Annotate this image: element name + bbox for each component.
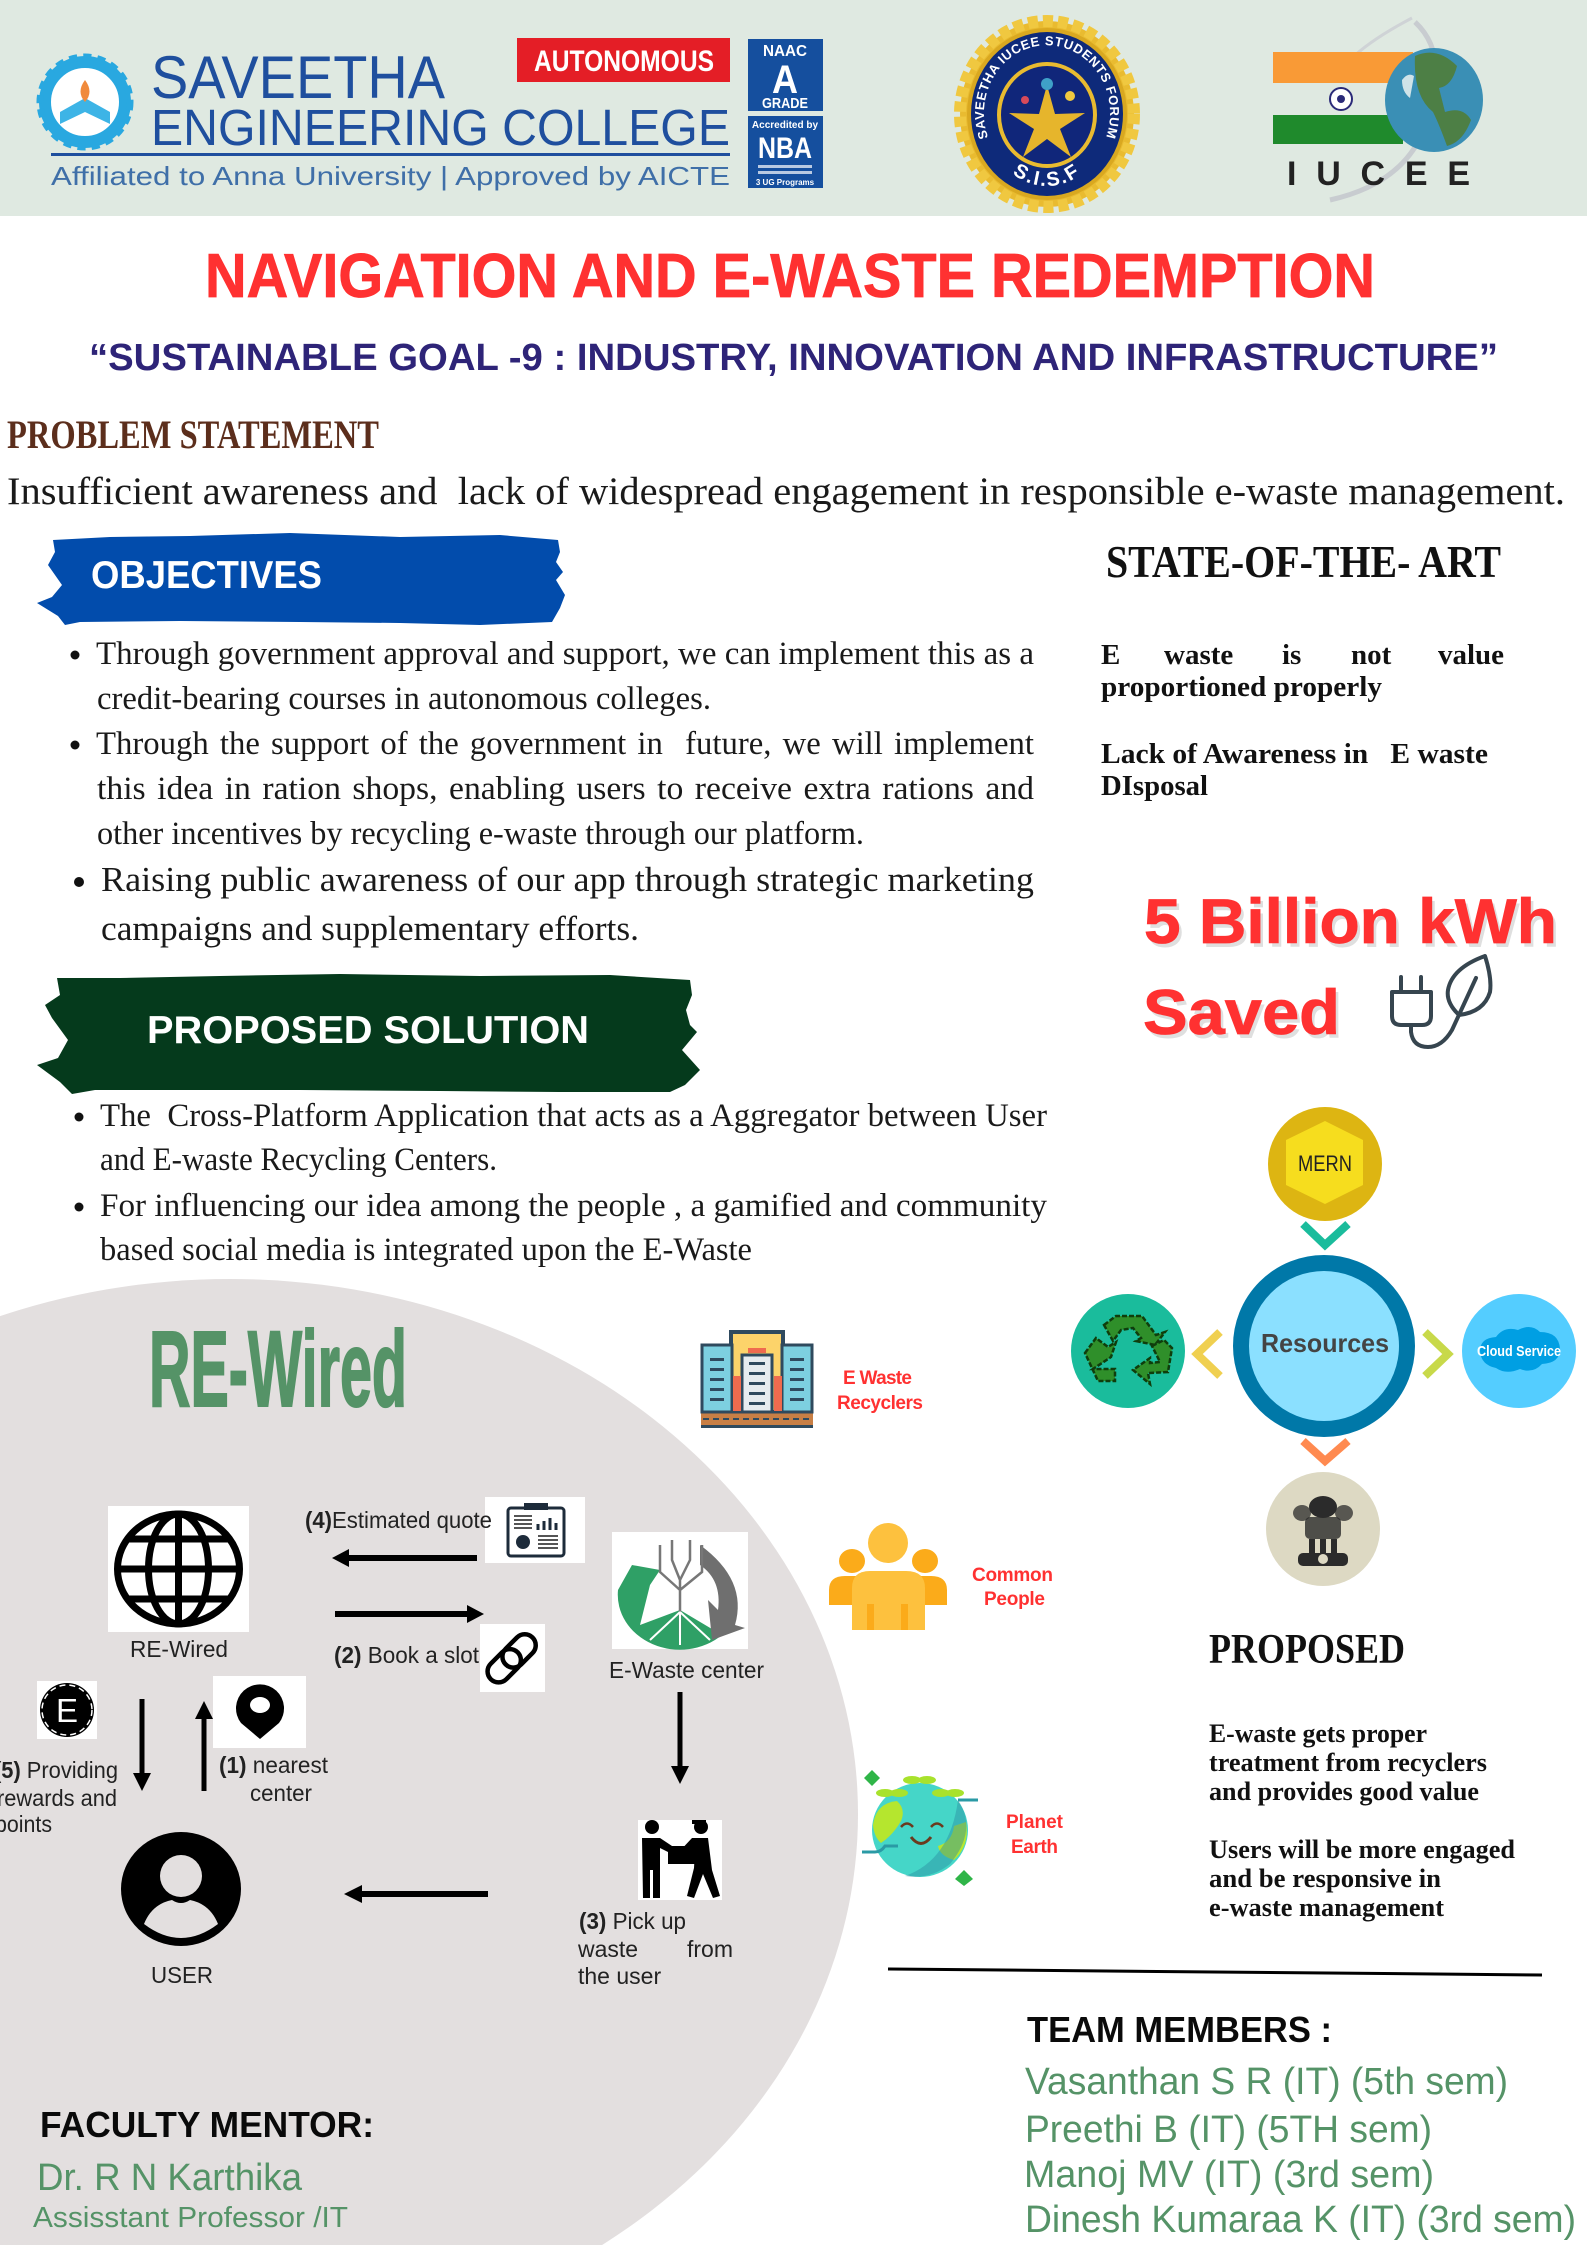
bullets: objectives: campaigns and supplementary efforts. (101, 909, 639, 948)
icon: SISF badge: SAVEETHA IUCEE STUDENTS FORUM (974, 36, 1119, 139)
callout: 5 billion kWh saved: Saved (1146, 982, 1343, 1052)
college rule line (51, 153, 730, 156)
callout: 5 billion kWh saved: 5 Billion kWh (1144, 887, 1557, 957)
text: state of the art: Lack of Awareness in E waste (1101, 738, 1488, 770)
icon: people group (829, 1523, 947, 1630)
college name (151, 44, 730, 156)
bullets: objectives: this idea in ration shops, enabling users to receive extra rations and (97, 771, 1035, 807)
panel: header band (0, 0, 1587, 216)
callout: 5 billion kWh saved (1143, 887, 1560, 1052)
icon: location pin (213, 1676, 306, 1748)
text: proposed benefits: Users will be more engaged (1209, 1835, 1516, 1864)
arrow: center to pickup (671, 1692, 689, 1784)
text: proposed benefits: and be responsive in (1209, 1864, 1442, 1893)
bullets: objectives: credit-bearing courses in autonomous colleges. (97, 681, 711, 717)
label: step 3: waste (577, 1936, 638, 1962)
badge: NBA: Accredited by (752, 120, 819, 131)
panel: proposed solution heading (37, 974, 700, 1094)
icon: reward coin (37, 1681, 97, 1739)
text: team member names: Preethi B (IT) (5TH sem) (1025, 2109, 1432, 2151)
icon: quote clipboard (485, 1497, 585, 1563)
icon: globe (108, 1506, 249, 1632)
callout: 5 billion kWh saved: Saved (1143, 978, 1340, 1048)
bullets: objectives: other incentives by recycling e-waste through our platform. (97, 816, 864, 852)
text: state of the art: DIsposal (1101, 770, 1208, 802)
icon: IUCEE flag and globe (1273, 18, 1483, 200)
stakeholder: planet earth (862, 1770, 1064, 1886)
text: state of the art: waste (1164, 639, 1233, 671)
badge: NAAC A grade: GRADE (762, 95, 808, 112)
heading: state of the art: STATE-OF-THE- ART (1106, 536, 1501, 587)
label: step 4: (4)Estimated quote (305, 1507, 492, 1533)
label: step 3: (3) Pick up (579, 1908, 686, 1934)
bullets: objectives: Through the support of the government in future, we will implement (96, 726, 1034, 762)
heading: faculty mentor: FACULTY MENTOR: (40, 2104, 374, 2145)
affiliation line: Affiliated to Anna University | Approved by AICTE (51, 161, 730, 191)
icon: pickup handover (638, 1820, 722, 1900)
node: MERN: MERN (1298, 1151, 1352, 1176)
icon: recycler buildings (701, 1332, 813, 1428)
badge: autonomous: AUTONOMOUS (534, 45, 714, 78)
badge: NBA: NBA (758, 132, 812, 165)
label: step 1 (219, 1752, 329, 1806)
label: user: USER (151, 1962, 213, 1988)
diagram: resources hub (1071, 1107, 1576, 1586)
arrow: lime chevron (1425, 1332, 1448, 1376)
brush stroke: proposed solution (37, 974, 700, 1094)
IUCEE wordmark: IUCEE (1287, 155, 1470, 193)
icon: e-waste center tree (612, 1532, 748, 1650)
badge: NAAC A grade: A (772, 58, 798, 102)
arrow: quote to RE-Wired (332, 1549, 477, 1567)
arrow: RE-Wired to booking (335, 1605, 484, 1623)
node: resources (1241, 1263, 1407, 1429)
arrow: yellow chevron (1197, 1332, 1220, 1376)
icon: SISF badge (954, 15, 1140, 213)
title: NAVIGATION AND E-WASTE REDEMPTION (205, 242, 1375, 311)
label: step 2: (2) Book a slot (334, 1642, 480, 1668)
text: team member names: Vasanthan S R (IT) (5th sem) (1025, 2061, 1508, 2103)
node: cloud service: Cloud Service (1477, 1343, 1561, 1360)
node: government emblem (1266, 1472, 1380, 1586)
node: recycled circuit (1071, 1294, 1185, 1408)
bullets: proposed solution: For influencing our idea among the people , a gamified and community (100, 1188, 1047, 1224)
icon: reward coin: E (56, 1692, 78, 1729)
arrow: orange chevron (1303, 1441, 1348, 1461)
icon: plug and leaf (1392, 956, 1490, 1047)
label: e waste recyclers: Recyclers (837, 1393, 923, 1414)
college name: SAVEETHA (151, 44, 445, 111)
label: e-waste center: E-Waste center (609, 1657, 764, 1683)
arrow: RE-Wired to user (133, 1699, 151, 1791)
label: planet earth: Planet (1006, 1812, 1064, 1833)
badge: NBA: 3 UG Programs (756, 178, 815, 187)
label: e waste recyclers: E Waste (843, 1368, 912, 1389)
text: state of the art: E (1101, 639, 1120, 671)
text: state of the art: proportioned properly (1101, 671, 1382, 703)
bullets: proposed solution: The Cross-Platform Application that acts as a Aggregator between User (100, 1098, 1047, 1134)
icon: smiling earth (862, 1770, 978, 1886)
label: step 1: (1) nearest (219, 1752, 329, 1778)
text: problem statement: Insufficient awareness and lack of widespread engagement in responsible e-waste management. (7, 470, 1565, 513)
panel: objectives heading (37, 533, 565, 625)
bullets: objectives (70, 636, 1035, 948)
label: step 1: center (250, 1780, 312, 1806)
label: step 3: the user (578, 1963, 661, 1989)
text: state of the art: is (1282, 639, 1301, 671)
text: proposed benefits (1209, 1719, 1516, 1922)
label: step 5 (0, 1757, 118, 1837)
label: common people (972, 1565, 1053, 1610)
subtitle: sustainable goal: “SUSTAINABLE GOAL -9 : INDUSTRY, INNOVATION AND INFRASTRUCTURE” (89, 337, 1498, 379)
label: common people: Common (972, 1565, 1053, 1586)
label: RE-Wired: RE-Wired (130, 1636, 228, 1662)
stakeholder: e waste recyclers (701, 1332, 923, 1428)
text: proposed benefits: treatment from recyclers (1209, 1748, 1487, 1777)
bullets: objectives: Through government approval and support, we can implement this as a (96, 636, 1034, 672)
icon: user (121, 1832, 241, 1946)
heading: RE-Wired: RE-Wired (149, 1308, 407, 1429)
bullets: proposed solution: and E-waste Recycling Centers. (100, 1142, 497, 1178)
arrow: user to RE-Wired (195, 1701, 213, 1791)
node: MERN (1268, 1107, 1382, 1221)
text: team member names: Dinesh Kumaraa K (IT) (3rd sem) (1025, 2199, 1576, 2241)
panel: proposed solution heading: PROPOSED SOLUTION (147, 1009, 589, 1052)
icon: college gear emblem (40, 57, 130, 147)
node: resources: Resources (1261, 1328, 1389, 1358)
label: step 3: from (687, 1936, 733, 1962)
badge: NAAC A grade (748, 39, 823, 112)
badge: NBA (748, 116, 823, 188)
arrow: pickup to user (344, 1885, 488, 1903)
badge: NAAC A grade: NAAC (763, 43, 807, 60)
label: step 5: rewards and (0, 1785, 117, 1811)
text: state of the art: value (1438, 639, 1504, 671)
text: state of the art (1101, 639, 1504, 802)
text: proposed benefits: e-waste management (1209, 1893, 1444, 1922)
panel: objectives heading: OBJECTIVES (91, 554, 322, 597)
arrow: teal chevron (1303, 1224, 1348, 1245)
text: mentor role: Assisstant Professor /IT (33, 2202, 348, 2234)
bullets: objectives: Raising public awareness of our app through strategic marketing (101, 860, 1034, 899)
panel: RE-Wired process circle (0, 1279, 858, 2245)
college name: ENGINEERING COLLEGE (151, 99, 730, 156)
badge: autonomous (517, 38, 730, 82)
stakeholder: common people (829, 1523, 1053, 1630)
text: team member names: Manoj MV (IT) (3rd sem) (1024, 2154, 1434, 2196)
text: mentor name: Dr. R N Karthika (37, 2157, 303, 2199)
label: common people: People (984, 1589, 1045, 1610)
label: planet earth: Earth (1011, 1837, 1058, 1858)
brush stroke: objectives (37, 533, 565, 625)
text: team member names (1024, 2061, 1576, 2241)
label: step 3 (577, 1908, 733, 1989)
icon: chain link (480, 1624, 545, 1692)
bullets: proposed solution (74, 1098, 1047, 1268)
label: planet earth (1006, 1812, 1064, 1858)
node: cloud service (1462, 1294, 1576, 1408)
heading: team members: TEAM MEMBERS : (1027, 2009, 1332, 2050)
icon: SISF badge: S.I.S.F (1014, 164, 1077, 186)
heading: proposed: PROPOSED (1209, 1627, 1405, 1673)
callout: 5 billion kWh saved: 5 Billion kWh (1147, 891, 1560, 961)
heading: problem statement: PROBLEM STATEMENT (7, 412, 379, 457)
text: proposed benefits: and provides good value (1209, 1777, 1479, 1806)
text: proposed benefits: E-waste gets proper (1209, 1719, 1427, 1748)
text: state of the art: not (1351, 639, 1392, 671)
label: e waste recyclers (837, 1368, 923, 1414)
bullets: proposed solution: based social media is integrated upon the E-Waste (100, 1232, 752, 1268)
